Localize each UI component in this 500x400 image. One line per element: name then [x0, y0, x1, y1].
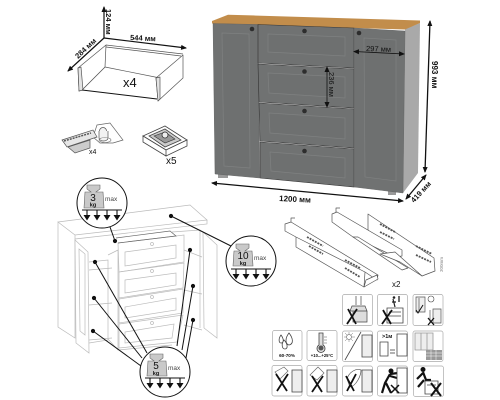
drawer 3 [259, 103, 354, 148]
tile: no chemicals [342, 294, 372, 326]
block quantity: x5 [166, 156, 177, 167]
tile: no abrasive [342, 366, 372, 396]
tile: no climbing [414, 366, 444, 396]
tile: no moving alone [378, 366, 408, 396]
dimension: 993 mm: 993 мм [430, 61, 439, 88]
callout: 10 kg max: 10 [237, 251, 249, 262]
callout: 5 kg max: max [168, 365, 181, 372]
dimension: 236 mm: 236 мм [327, 72, 336, 97]
tile: humidity 60-70%: 60-70% [279, 353, 295, 358]
tile: distance over 1 m: >1м [382, 334, 392, 340]
front runner [296, 230, 365, 287]
right door [354, 28, 405, 193]
knobs [250, 27, 361, 153]
dimension: 124 mm: 124 мм [104, 9, 113, 35]
left door [213, 24, 260, 178]
callout: 5 kg max [140, 347, 190, 397]
icon: hinge [62, 123, 123, 156]
drawer fronts [118, 235, 184, 272]
back runner [368, 214, 435, 276]
tile: no wet cleaning [272, 366, 302, 396]
base feet [218, 174, 396, 195]
callout: 10 kg max: kg [240, 261, 246, 267]
runner quantity: x2 [392, 280, 401, 289]
cabinet illustration [212, 15, 439, 205]
callout: 3 kg max: kg [90, 202, 96, 208]
callout: 3 kg max: max [105, 196, 118, 203]
hinge quantity: x4 [89, 149, 96, 156]
drawer 1 [258, 24, 354, 68]
dimension: 1200 mm: 1200 мм [279, 194, 311, 205]
callout: 10 kg max [226, 236, 276, 286]
dimension: 297 mm: 297 мм [366, 44, 391, 54]
tile: windows and floor [413, 331, 443, 362]
dimension: 993 mm [425, 21, 439, 172]
callout: 5 kg max: 5 [153, 361, 159, 372]
tile: temperature range [307, 330, 337, 360]
callout: 10 kg max: max [254, 255, 267, 262]
drawer 4 [260, 142, 354, 187]
callout: 3 kg max: 3 [90, 193, 96, 204]
drawer box [78, 45, 183, 101]
dimension: 544 mm: 544 мм [130, 33, 156, 43]
tile: distance over 1 m [378, 331, 408, 362]
tile: no standing on furniture [378, 294, 408, 326]
drawer dimensions diagram [68, 7, 186, 101]
dimension: 297 mm [354, 44, 404, 54]
carcass outline [58, 205, 207, 338]
open cabinet line drawing [58, 205, 231, 366]
drawer quantity: x4 [123, 75, 137, 90]
drawer runners [285, 208, 435, 287]
tile: avoid sunlight [342, 331, 372, 362]
tile: no wet cloth [307, 366, 337, 396]
drawer 2 [258, 64, 354, 108]
tile: humidity 60-70% [272, 330, 302, 360]
dimension: 284 mm: 284 мм [73, 36, 98, 60]
icon: mounting block [143, 126, 187, 167]
worktop [212, 15, 420, 30]
dimension: 1200 mm [212, 183, 403, 205]
side panel [403, 23, 420, 193]
callout: 5 kg max: kg [153, 371, 159, 377]
dimension: 236 mm [327, 67, 336, 107]
runner length: 300mm [439, 257, 444, 272]
dimension: 419 mm: 419 мм [409, 179, 433, 204]
dimension arrows [68, 7, 186, 71]
tile: temperature range: +10...+25°C [311, 353, 333, 358]
slot marks [307, 224, 432, 277]
care icon grid [272, 294, 444, 396]
tile: correct door use [413, 294, 443, 326]
callout: 3 kg max [77, 178, 127, 228]
pointer lines [91, 214, 231, 366]
